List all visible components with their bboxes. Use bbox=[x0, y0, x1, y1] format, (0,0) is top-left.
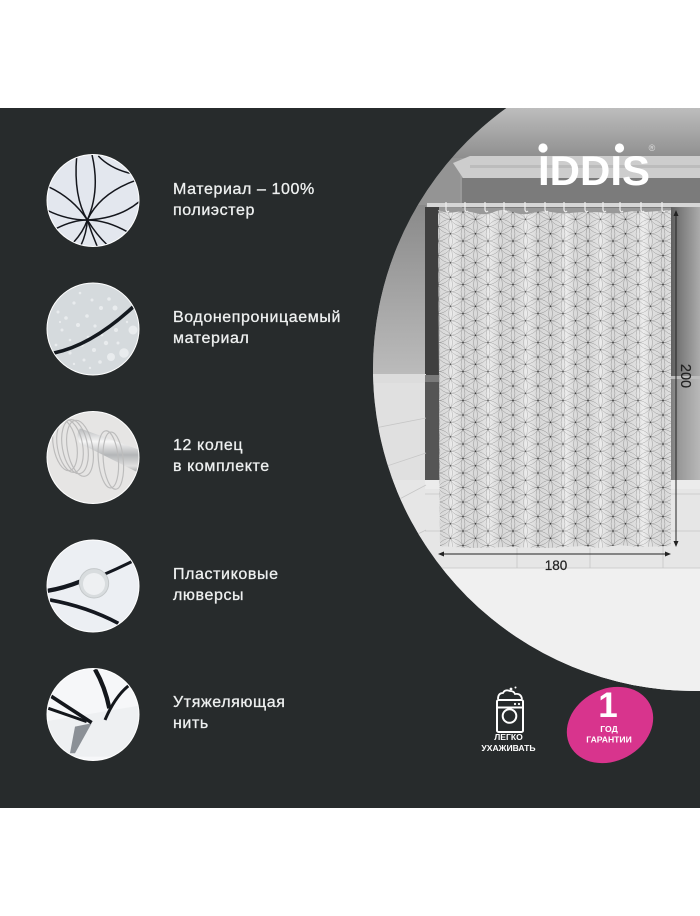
text: weighted thread: Утяжеляющая bbox=[173, 694, 286, 711]
dimension: width 180: 180 bbox=[545, 558, 567, 573]
text: easy care: УХАЖИВАТЬ bbox=[481, 743, 536, 753]
text: warranty: ГАРАНТИИ bbox=[586, 734, 632, 744]
feature 4: grommets bbox=[46, 540, 279, 632]
text: waterproof: материал bbox=[173, 330, 249, 347]
care badge bbox=[481, 686, 536, 753]
pink blob bbox=[553, 672, 667, 778]
feature 3: rings bbox=[46, 411, 270, 504]
text: grommets: Пластиковые bbox=[173, 566, 279, 583]
dimension: height 200 bbox=[674, 210, 693, 547]
text: material: полиэстер bbox=[173, 202, 255, 219]
logo: IDDIS: ® bbox=[649, 143, 656, 153]
icon: water drops bbox=[46, 282, 140, 376]
feature 1: material bbox=[46, 153, 315, 247]
text: waterproof: Водонепроницаемый bbox=[173, 309, 341, 326]
bathroom photo in large circle bbox=[360, 108, 700, 710]
text: weighted thread: нить bbox=[173, 715, 209, 732]
text: easy care: ЛЕГКО bbox=[494, 732, 523, 742]
dimension: width 180 bbox=[438, 552, 671, 573]
text: rings: в комплекте bbox=[173, 458, 270, 475]
feature 2: waterproof bbox=[46, 282, 341, 376]
curtain bbox=[438, 205, 671, 550]
icon: washing machine bbox=[497, 686, 523, 732]
icon: plastic grommet bbox=[46, 540, 140, 632]
text: grommets: люверсы bbox=[173, 587, 244, 604]
dimension: height 200: 200 bbox=[677, 364, 693, 388]
warranty badge bbox=[553, 672, 667, 778]
curtain rings bbox=[446, 202, 665, 212]
logo: IDDIS: IDDIS bbox=[538, 147, 650, 194]
dark background panel bbox=[0, 108, 700, 808]
icon: rod and rings bbox=[46, 411, 140, 504]
shower rod bbox=[427, 203, 700, 207]
text: material: Материал – 100% bbox=[173, 181, 315, 198]
text: warranty: ГОД bbox=[600, 724, 618, 734]
number 1: 1 bbox=[598, 686, 618, 725]
icon: weighted hem bbox=[43, 668, 143, 761]
text: rings: 12 колец bbox=[173, 437, 243, 454]
icon: fabric pattern bbox=[46, 153, 140, 247]
feature 5: weighted thread bbox=[43, 668, 286, 761]
